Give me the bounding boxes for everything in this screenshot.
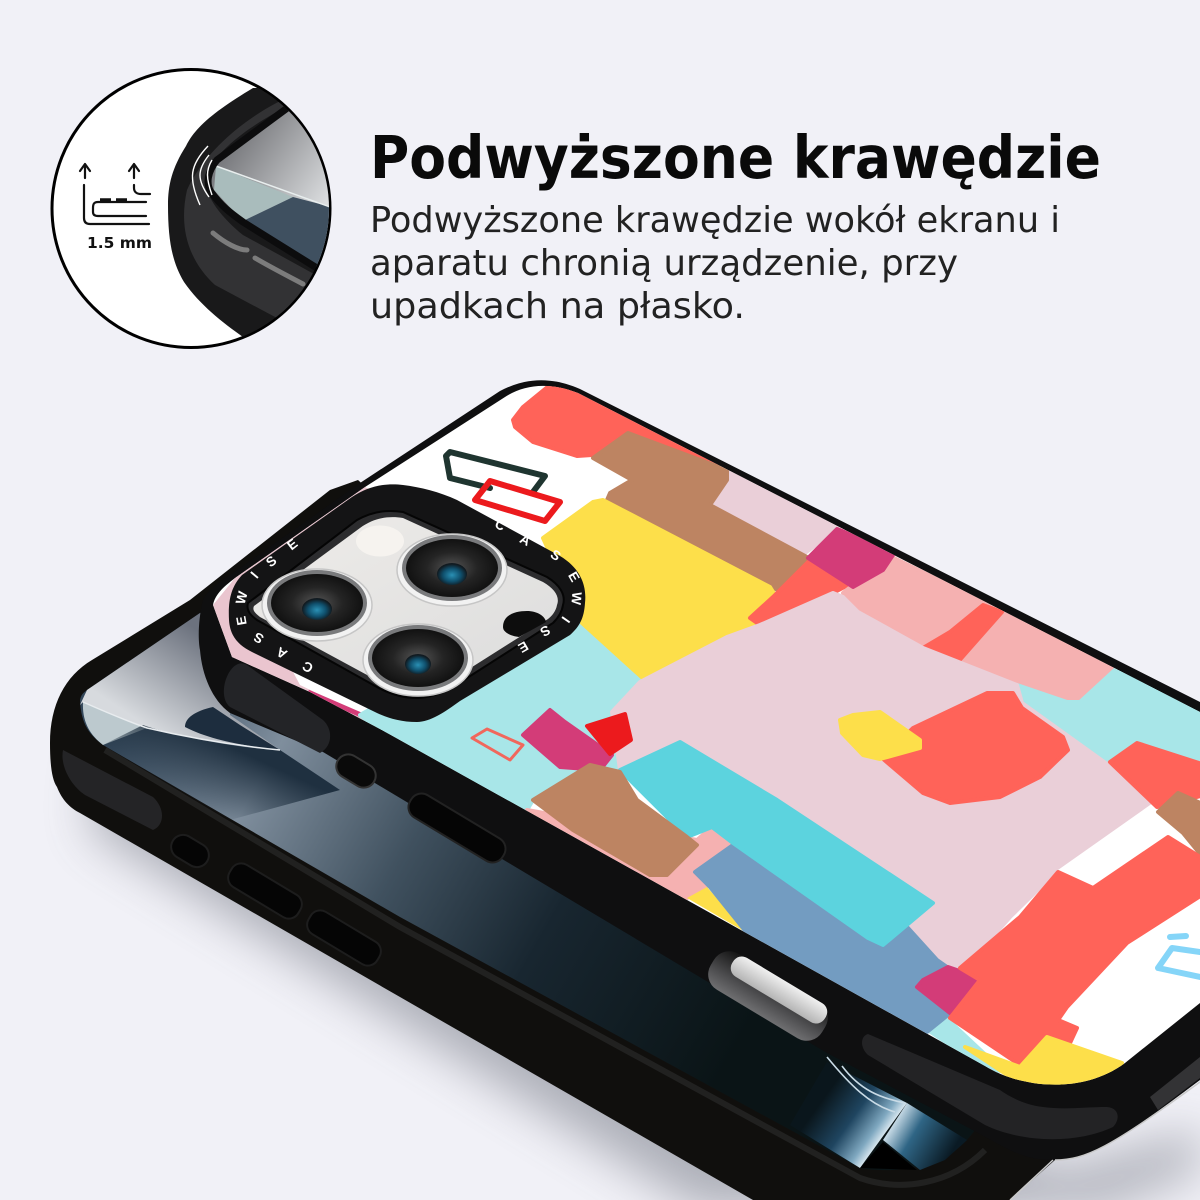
art: blue [695, 845, 948, 1032]
inset: white arcs [192, 146, 212, 205]
drop shadow under phones [90, 740, 1200, 1200]
back phone [50, 480, 1055, 1200]
CASEWISE ring lettering: I [248, 569, 262, 581]
inset: inner edge dark [208, 106, 320, 270]
art: magenta lower [523, 710, 612, 770]
charging button [727, 953, 831, 1027]
CASEWISE ring lettering: S [538, 622, 553, 640]
CASEWISE ring lettering: E [565, 569, 583, 584]
art: big pale pink [612, 593, 1153, 968]
back phone grip [62, 750, 162, 830]
CASEWISE ring lettering: E [284, 536, 300, 553]
art: aqua right [1017, 668, 1200, 765]
camera inner lip [247, 511, 564, 698]
art: aqua field [360, 620, 647, 810]
wallpaper glow bottom corner [790, 1057, 967, 1170]
body text: aparatu chronią urządzenie, przy [370, 243, 958, 284]
heading: Podwyższone krawędzie [370, 123, 1101, 192]
art base [200, 370, 1200, 1110]
lens: bottom [363, 624, 473, 696]
art: coral blob [882, 693, 1068, 803]
CASEWISE ring lettering: S [251, 629, 266, 647]
case artwork [200, 370, 1200, 1110]
inset: dark wedge [243, 197, 335, 267]
art: coral top [513, 385, 723, 468]
art: magenta sliver [308, 692, 368, 718]
screen dark band [103, 725, 340, 820]
CASEWISE ring lettering: E [516, 638, 531, 656]
body text: upadkach na płasko. [370, 286, 745, 327]
mic hole [503, 611, 546, 637]
inset: screen [210, 110, 335, 267]
flash [356, 526, 404, 556]
case speaker grille [1150, 1057, 1200, 1110]
carbon grip: bottom corner [862, 1034, 1118, 1139]
art: teal [620, 742, 933, 945]
art: brown top [593, 433, 808, 590]
CASEWISE ring lettering: C [492, 516, 508, 534]
camera outer ring [229, 484, 585, 722]
art: light blue outline [1158, 936, 1200, 977]
art: small coral outline [472, 729, 523, 760]
screen dark hump [185, 707, 280, 750]
body text [370, 200, 1060, 327]
art: brown lower [533, 765, 697, 875]
CASEWISE ring lettering: E [233, 615, 250, 627]
CASEWISE ring lettering: I [558, 614, 573, 625]
lens: left [262, 569, 372, 641]
CASEWISE ring lettering: A [517, 531, 533, 549]
art: coral right [1110, 743, 1200, 807]
back phone buttons [167, 830, 385, 970]
art: white patch [1058, 804, 1152, 871]
front phone side buttons [332, 750, 835, 1047]
art: salmon [843, 556, 1117, 702]
back phone frame [50, 480, 1055, 1200]
art: yellow [543, 500, 775, 682]
camera inner opening [253, 517, 558, 692]
art: yellow bottom-left [687, 887, 742, 930]
art: salmon lower [527, 810, 733, 898]
back phone rim highlight [105, 750, 985, 1185]
CASEWISE ring lettering: C [300, 658, 316, 676]
art: coral stripe [923, 605, 1002, 663]
lens: right [397, 534, 507, 606]
art: pale pink upper [713, 466, 852, 554]
art: magenta corner [917, 967, 980, 1013]
bottom silver rim [1010, 1082, 1200, 1200]
art: red outline [475, 481, 560, 521]
CASEWISE ring lettering: A [274, 644, 290, 662]
inset: highlight streak [213, 233, 303, 284]
inset: lower-left reflection [214, 166, 293, 221]
CASEWISE ring lettering [233, 516, 585, 676]
camera surround [229, 484, 585, 722]
screen pale reflection [83, 702, 147, 745]
inset: translucent bumper band [184, 102, 312, 318]
art: magenta top [808, 529, 895, 587]
back phone screen [80, 530, 1000, 1170]
screen glare line [83, 702, 280, 750]
body text: Podwyższone krawędzie wokół ekranu i [370, 200, 1060, 241]
case frame [199, 380, 1200, 1160]
art: big coral [950, 837, 1200, 1065]
inset: case edge [168, 88, 314, 336]
art: brown right [1158, 793, 1200, 860]
art: orange [750, 562, 852, 625]
CASEWISE ring lettering: W [233, 589, 251, 606]
art: red square [587, 714, 631, 754]
charging button recess [701, 945, 835, 1047]
CASEWISE ring lettering: W [568, 591, 585, 606]
art: lower aqua [928, 1018, 1002, 1074]
art: dark outline [446, 452, 545, 492]
icon: 1.5 mm raised edge diagram [80, 164, 150, 224]
carbon grip: left [224, 663, 330, 753]
art: yellow blob [840, 712, 920, 759]
art: yellow bottom [965, 1037, 1122, 1090]
screen wedge light [80, 613, 280, 750]
inset: glare line [216, 166, 330, 207]
CASEWISE ring lettering: S [263, 553, 279, 570]
CASEWISE ring lettering: S [548, 547, 564, 564]
inset circle: raised edge close-up [52, 70, 340, 348]
art: pink sliver at left [213, 487, 380, 722]
front phone case [199, 370, 1200, 1200]
label: 1.5 mm: 1.5 mm [87, 234, 152, 252]
